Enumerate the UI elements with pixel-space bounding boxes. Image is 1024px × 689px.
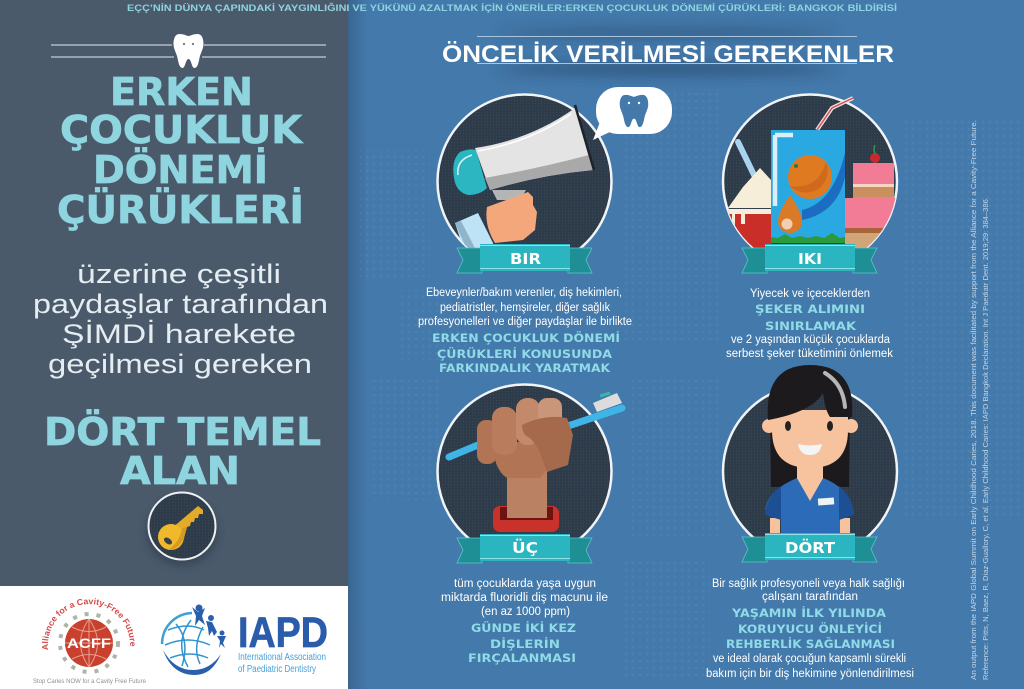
panel: ÜÇ bbox=[438, 384, 622, 665]
ribbon: IKI: IKI bbox=[798, 250, 822, 268]
text block: IKI: ve 2 yaşından küçük çocuklarda bbox=[731, 334, 891, 346]
ribbon: ÜÇ: ÜÇ bbox=[512, 538, 538, 557]
main title: DÖNEMİ bbox=[93, 148, 268, 192]
ribbon: DÖRT bbox=[742, 533, 877, 562]
subtitle text: geçilmesi gereken bbox=[48, 349, 312, 379]
panel: DÖRT bbox=[706, 365, 914, 680]
blue background panel bbox=[348, 0, 1024, 689]
text block: DÖRT: Bir sağlık profesyoneli veya halk sağlığı bbox=[712, 578, 905, 590]
logo: IAPD: International Association bbox=[238, 652, 326, 663]
subtitle text bbox=[33, 259, 328, 379]
ribbon: IKI bbox=[742, 244, 877, 273]
text block: ÜÇ: (en az 1000 ppm) bbox=[481, 606, 570, 618]
icon: juice, ice cream and cake bbox=[723, 94, 897, 268]
text block: BIR: pediatristler, hemşireler, diğer sağlık bbox=[440, 302, 610, 314]
logo: ACFF: Alliance for a Cavity-Free Future bbox=[42, 598, 135, 650]
main title: ÇÜRÜKLERİ bbox=[57, 188, 304, 232]
text block: DÖRT: çalışanı tarafından bbox=[762, 591, 858, 603]
logo: ACFF bbox=[33, 598, 147, 685]
subtitle text: ŞİMDİ harekete bbox=[62, 318, 296, 349]
vertical source credits: An output from the IAPD Global Summit on Early Childhood Caries, 2018. This document was facilitated by support from the Alliance for a Cavity-Free Future. bbox=[971, 120, 978, 680]
text block: BIR: Ebeveynler/bakım verenler, diş hekimleri, bbox=[426, 287, 622, 299]
text block: ÜÇ bbox=[441, 578, 608, 665]
logo: IAPD: of Paediatric Dentistry bbox=[238, 664, 316, 675]
text block: IKI: serbest şeker tüketimini önlemek bbox=[726, 348, 893, 360]
icon: fist holding toothbrush bbox=[438, 384, 622, 558]
four key areas heading: ALAN bbox=[120, 449, 240, 493]
text block: DÖRT: KORUYUCU ÖNLEYİCİ bbox=[738, 621, 882, 636]
right heading bbox=[442, 29, 894, 74]
text block: BIR bbox=[418, 287, 632, 375]
ribbon: ÜÇ bbox=[457, 534, 592, 563]
four key areas heading: DÖRT TEMEL bbox=[44, 410, 321, 454]
text block: ÜÇ: FIRÇALANMASI bbox=[468, 651, 576, 665]
text block: DÖRT: REHBERLİK SAĞLANMASI bbox=[726, 636, 895, 651]
text block: ÜÇ: miktarda fluoridli diş macunu ile bbox=[441, 592, 608, 604]
vertical source credits: Reference: Pitts, N, Baez, R, Diaz-Guallory, C, et al. Early Childhood Caries: IAPD Bangkok Declaration. Int J Paediatr Dent. 2019;29: 384–386. bbox=[983, 197, 990, 680]
subtitle text: paydaşlar tarafından bbox=[33, 289, 328, 319]
logo: ACFF: ACFF bbox=[67, 635, 112, 651]
logo: IAPD: IAPD bbox=[238, 609, 328, 657]
ribbon: BIR: BIR bbox=[510, 250, 541, 268]
icon: health professional bbox=[723, 365, 897, 558]
panel: BIR bbox=[418, 87, 672, 375]
panel: IKI bbox=[723, 94, 897, 360]
icon: megaphone bbox=[436, 87, 672, 248]
right heading: ÖNCELİK VERİLMESİ GEREKENLER bbox=[442, 41, 894, 68]
text block: BIR: FARKINDALIK YARATMAK bbox=[439, 361, 611, 375]
text block: IKI bbox=[726, 288, 893, 360]
vertical source credits bbox=[971, 120, 990, 680]
top running header: EÇÇ’NİN DÜNYA ÇAPINDAKİ YAYGINLIĞINI VE YÜKÜNÜ AZALTMAK İÇİN ÖNERİLER:ERKEN ÇOCUKLUK DÖNEMİ ÇÜRÜKLERİ: BANGKOK BİLDİRİSİ bbox=[127, 2, 897, 14]
icon: speech bubble with tooth bbox=[593, 87, 672, 140]
text block: BIR: ERKEN ÇOCUKLUK DÖNEMİ bbox=[432, 330, 620, 345]
icon: key bbox=[146, 492, 218, 566]
text block: DÖRT: bakım için bir diş hekimine yönlendirilmesi bbox=[706, 668, 914, 680]
text block: ÜÇ: GÜNDE İKİ KEZ bbox=[471, 620, 576, 635]
four key areas heading bbox=[44, 410, 321, 493]
footer logos panel bbox=[0, 586, 348, 689]
logo: IAPD bbox=[162, 604, 328, 675]
ribbon: DÖRT: DÖRT bbox=[785, 538, 836, 557]
text block: IKI: Yiyecek ve içeceklerden bbox=[750, 288, 870, 300]
main title bbox=[57, 70, 304, 232]
text block: IKI: ŞEKER ALIMINI bbox=[755, 302, 865, 316]
text block: IKI: SINIRLAMAK bbox=[765, 319, 857, 333]
text block: BIR: profesyonelleri ve diğer paydaşlar ile birlikte bbox=[418, 316, 632, 328]
text block: DÖRT: ve ideal olarak çocuğun kapsamlı sürekli bbox=[713, 653, 906, 665]
tooth emblem with rules bbox=[51, 34, 326, 68]
main title: ÇOCUKLUK bbox=[60, 108, 304, 152]
main title: ERKEN bbox=[110, 70, 253, 114]
left panel background bbox=[0, 0, 348, 586]
text block: ÜÇ: tüm çocuklarda yaşa uygun bbox=[454, 578, 596, 590]
subtitle text: üzerine çeşitli bbox=[77, 259, 281, 289]
logo: ACFF: Stop Caries NOW for a Cavity Free Future bbox=[33, 679, 147, 685]
text block: BIR: ÇÜRÜKLERİ KONUSUNDA bbox=[437, 346, 612, 361]
text block: DÖRT: YAŞAMIN İLK YILINDA bbox=[731, 605, 886, 620]
text block: ÜÇ: DİŞLERİN bbox=[490, 636, 560, 651]
ribbon: BIR bbox=[457, 244, 592, 273]
text block: DÖRT bbox=[706, 578, 914, 680]
